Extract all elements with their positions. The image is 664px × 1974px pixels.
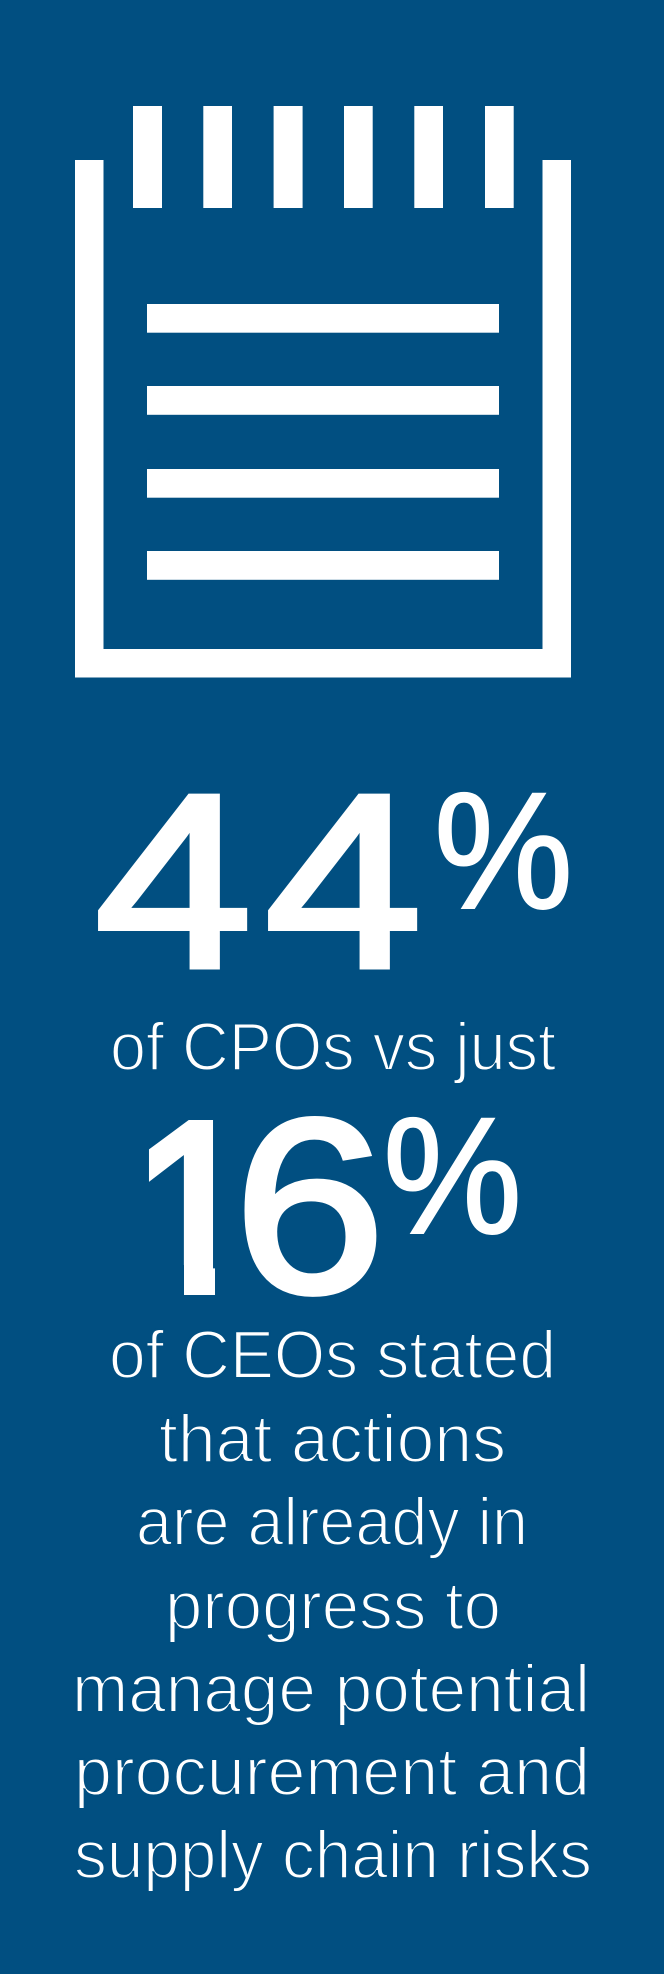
body text: procurement and (74, 1734, 590, 1810)
body text (72, 1317, 592, 1893)
statistic: 16% (148, 1116, 518, 1297)
infographic panel (75, 106, 589, 1891)
number 4, second digit: 4 (265, 744, 422, 1020)
notepad text lines (147, 304, 499, 580)
text: of CPOs vs just: of CPOs vs just (110, 1009, 556, 1085)
body text: manage potential (72, 1651, 590, 1727)
body text: supply chain risks (74, 1817, 592, 1893)
body text: are already in (136, 1484, 528, 1560)
notepad binding ticks (133, 106, 514, 208)
body text: progress to (165, 1568, 501, 1644)
percent sign: % (434, 759, 573, 944)
notepad frame (75, 160, 571, 678)
body text: that actions (159, 1401, 506, 1477)
number 4, first digit: 4 (95, 744, 252, 1020)
body text: of CEOs stated (109, 1317, 556, 1393)
icon: notepad (75, 106, 571, 678)
number 6: 6 (234, 1068, 385, 1344)
statistic: 44% (95, 744, 573, 1020)
percent sign: % (383, 1084, 522, 1269)
number 1: 1 (132, 1074, 257, 1344)
